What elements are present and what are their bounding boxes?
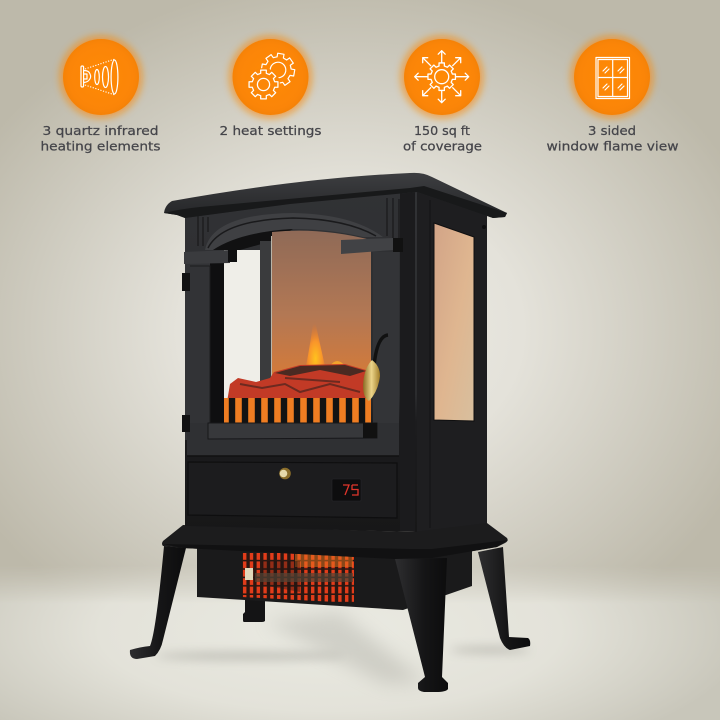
floor shadows [155, 612, 530, 684]
arch moulding [198, 198, 399, 250]
fire chamber [272, 231, 371, 400]
side panel [415, 185, 487, 534]
left leg [130, 546, 186, 659]
door right stile [373, 252, 399, 455]
feature: flame view [546, 36, 678, 154]
icon: gears [230, 36, 312, 118]
infrared grill [242, 553, 354, 603]
illustration: electric stove heater [130, 173, 530, 692]
label: quartz infrared: 3 quartz infrared [42, 123, 158, 138]
left capital [184, 250, 230, 264]
label: flame view: window flame view [546, 138, 678, 154]
door left stile [185, 262, 224, 440]
grate [224, 398, 371, 423]
front right leg [395, 558, 448, 692]
icon: outward arrows [401, 36, 483, 118]
side window [434, 223, 474, 421]
temperature display [332, 479, 361, 501]
label: flame view [546, 123, 678, 154]
feature: quartz infrared [40, 36, 160, 154]
right capital [341, 238, 393, 254]
label: quartz infrared [40, 123, 160, 154]
heater box [197, 548, 472, 610]
feature: heat settings [220, 36, 322, 138]
door lower rail [187, 423, 399, 456]
brass knob [279, 468, 291, 479]
window opening: clear left pane [224, 250, 260, 410]
sill [208, 423, 377, 439]
side screw [482, 225, 486, 229]
label: quartz infrared: heating elements [40, 138, 160, 154]
control drawer [188, 462, 397, 518]
label: flame view: 3 sided [588, 123, 636, 138]
stove top [164, 173, 507, 218]
icon: window [571, 36, 653, 118]
flame [306, 316, 325, 366]
label: coverage: of coverage [403, 138, 482, 154]
hinges [182, 273, 190, 432]
label: coverage: 150 sq ft [414, 123, 470, 138]
back leg [243, 598, 265, 622]
base plinth [162, 523, 508, 559]
left inner post [260, 241, 272, 400]
logs [227, 364, 366, 402]
label: coverage [403, 123, 482, 154]
corner post shadow [400, 190, 415, 531]
label: heat settings: 2 heat settings [220, 123, 322, 138]
feature: coverage [401, 36, 483, 154]
icon: infrared heating elements [60, 36, 142, 118]
door handle [363, 335, 388, 401]
right rear leg [478, 547, 530, 650]
front panel [185, 188, 417, 532]
